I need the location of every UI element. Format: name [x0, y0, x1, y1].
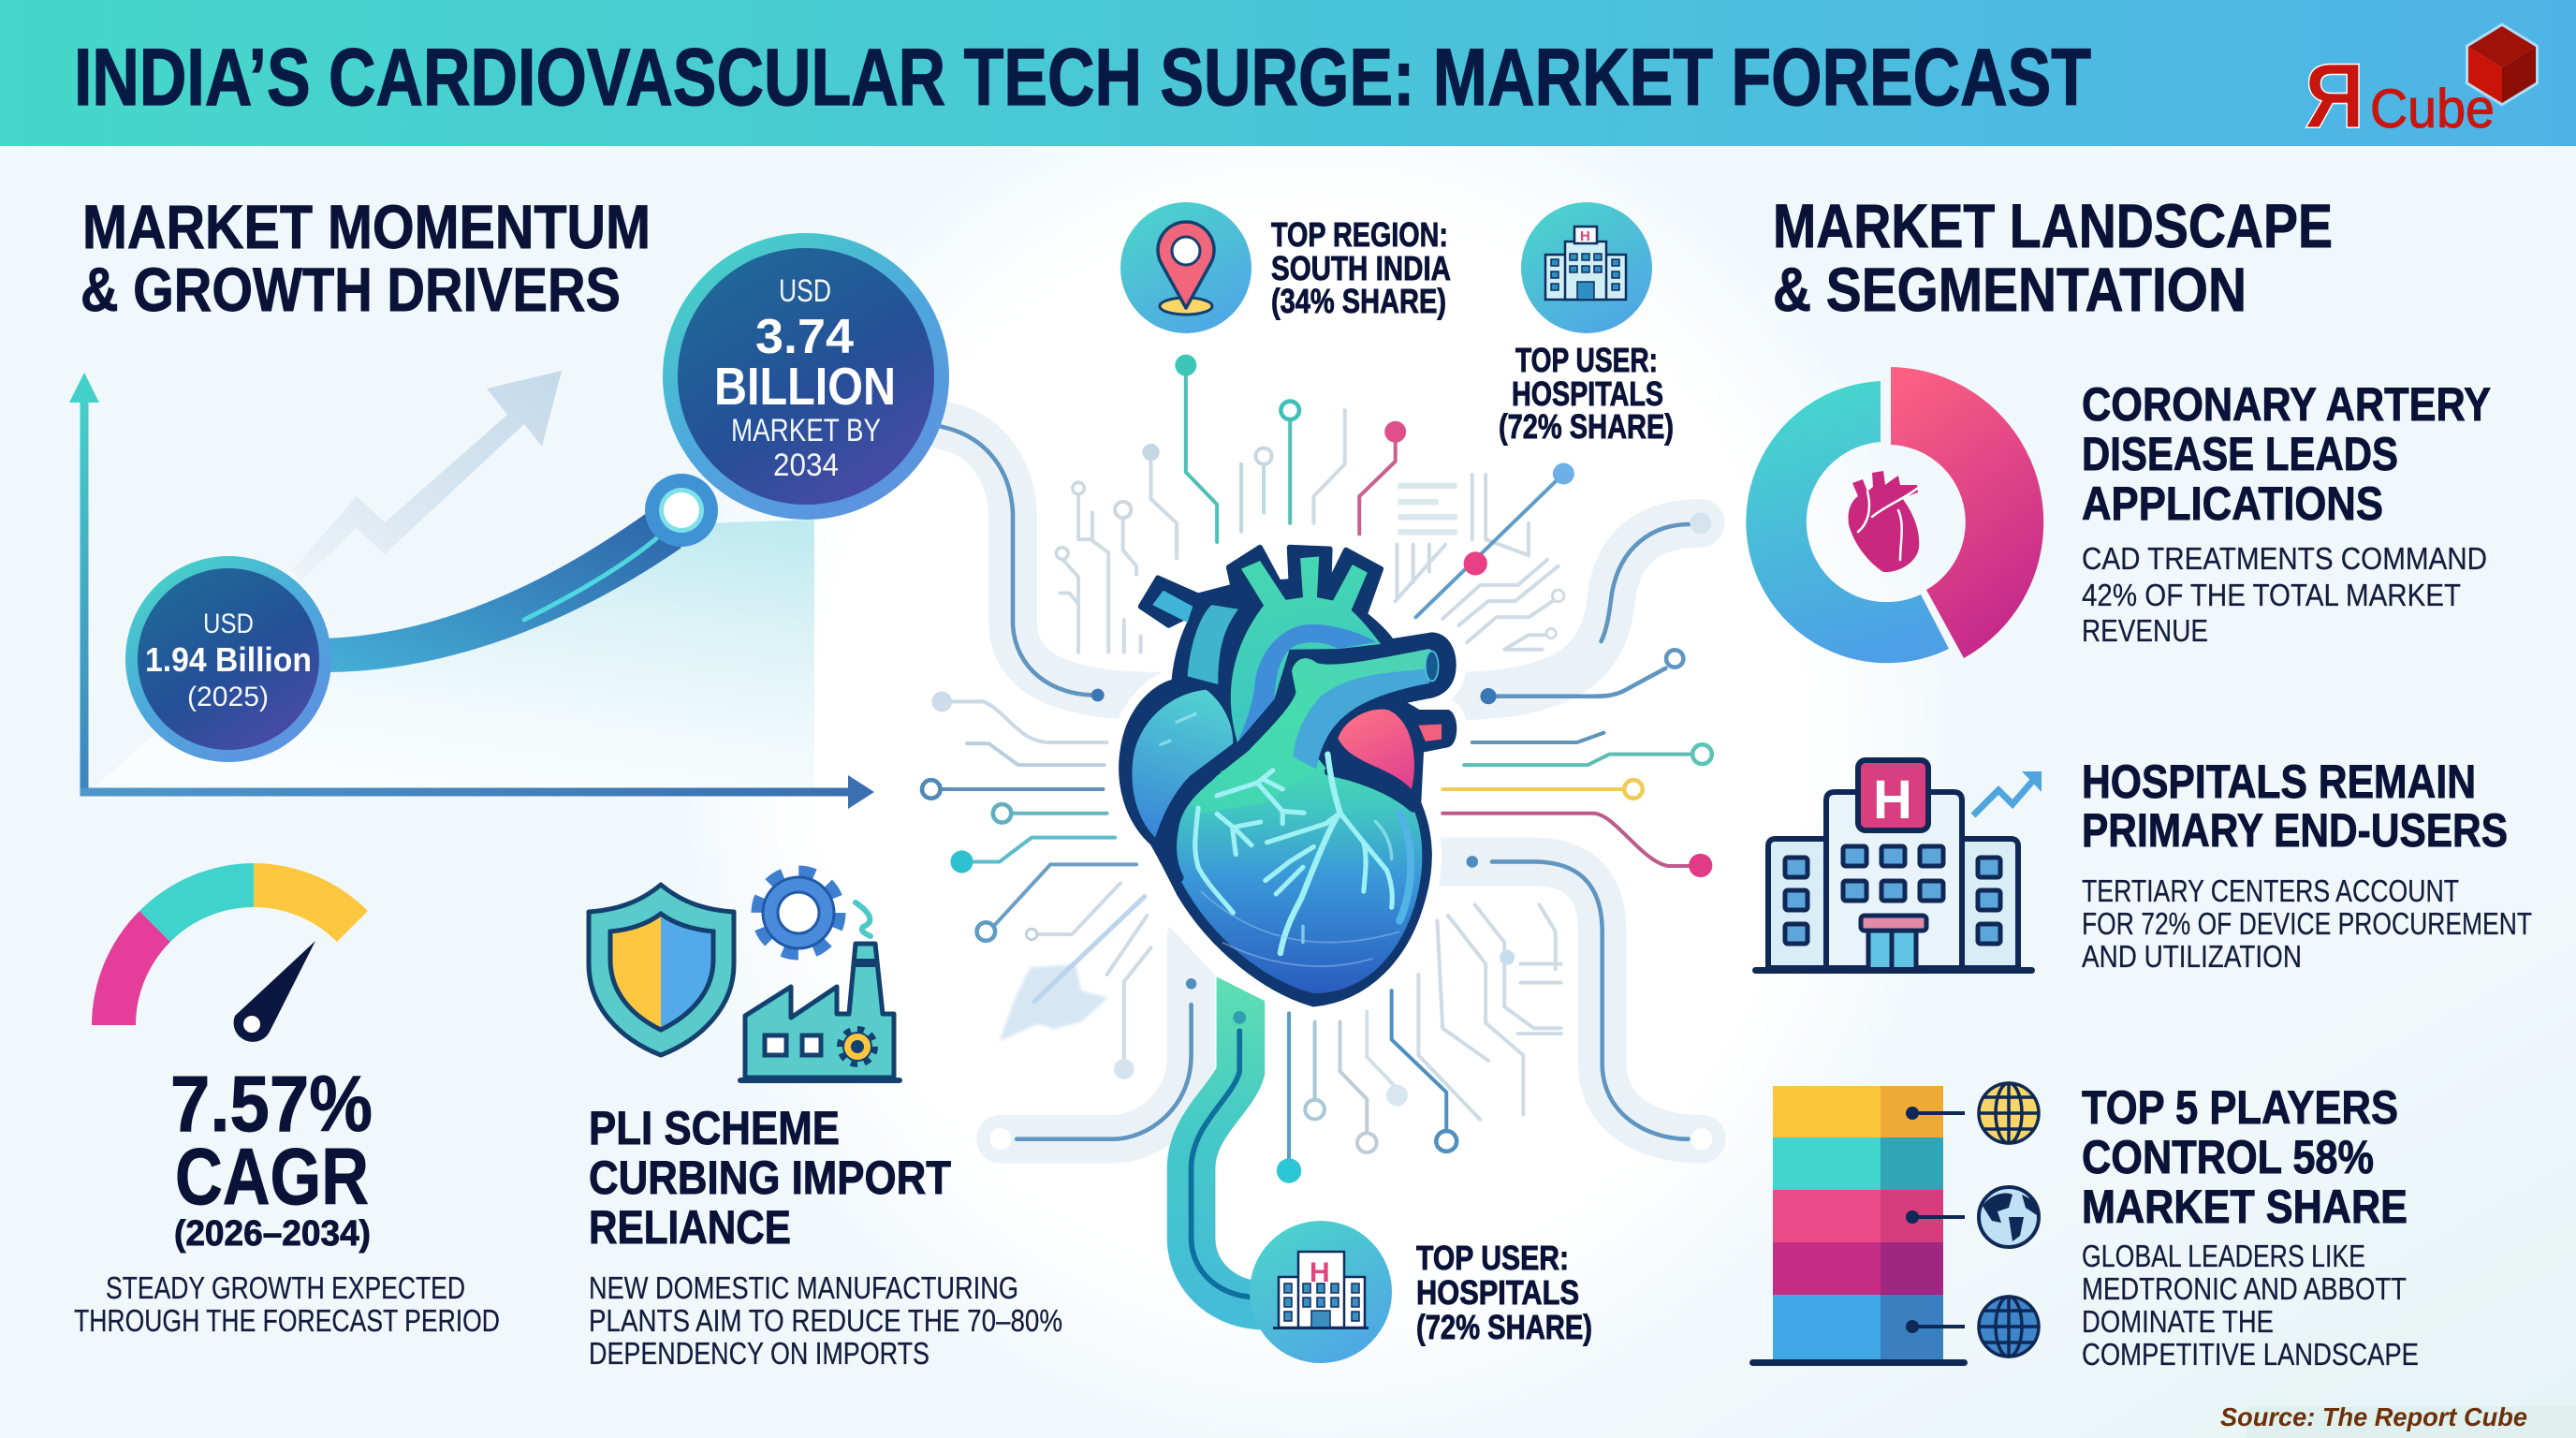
heart: green arch and vessels: [1231, 556, 1381, 742]
globe: yellow: [1979, 1083, 2039, 1143]
text: top user (lower): [1416, 1239, 1592, 1346]
wide pale circuit bands: [943, 425, 1702, 1139]
heart: ventricle right rim: [1399, 814, 1411, 921]
text: top user (lower): HOSPITALS: [1416, 1273, 1579, 1312]
text: hospitals remain: AND UTILIZATION: [2082, 939, 2302, 974]
text: top user (lower): (72% SHARE): [1416, 1308, 1592, 1346]
donut chart: [1746, 367, 2043, 663]
text: PLI scheme: NEW DOMESTIC MANUFACTURING: [589, 1270, 1018, 1305]
text: coronary artery: CAD TREATMENTS COMMAND: [2082, 541, 2487, 576]
bubble: 2034 value: MARKET BY: [731, 413, 881, 448]
gauge: [92, 863, 368, 1042]
top user: hospital icon badge: [1521, 202, 1652, 333]
text: top user (upper): HOSPITALS: [1512, 374, 1663, 413]
shaded area under curve: [94, 520, 814, 792]
top user: hospital badge lower: H: [1310, 1257, 1330, 1288]
growth curve: [318, 510, 681, 672]
text: PLI scheme: [589, 1102, 1062, 1371]
x axis: [80, 775, 874, 809]
circuit nodes: [922, 355, 1712, 1183]
bubble: 2034 value: BILLION: [714, 357, 896, 417]
bubble: 2034 value: USD: [779, 273, 831, 309]
light blue diagonal: [1034, 897, 1145, 1002]
text: hospitals remain: HOSPITALS REMAIN: [2082, 756, 2476, 808]
curve node: [645, 474, 718, 547]
donut: CAD share: [1891, 367, 2043, 658]
text: top region: SOUTH INDIA: [1271, 249, 1451, 287]
heart halo: [1121, 548, 1454, 1005]
heart: highlights: [1161, 714, 1392, 943]
teal band to hospital node: [1192, 969, 1266, 1306]
growth chart: [69, 233, 949, 809]
text: top user (upper): TOP USER:: [1515, 341, 1658, 379]
text: PLI scheme: RELIANCE: [589, 1201, 791, 1254]
stat: CAGR: THROUGH THE FORECAST PERIOD: [74, 1303, 500, 1338]
heart silhouette: [1121, 548, 1454, 1005]
text: top user (upper): [1499, 341, 1674, 446]
heading: market landscape: & SEGMENTATION: [1773, 255, 2247, 324]
text: PLI scheme: PLANTS AIM TO REDUCE THE 70–80%: [589, 1303, 1062, 1338]
gauge needle: [234, 941, 315, 1042]
icon: hospital building: [1752, 760, 2042, 974]
y axis: [69, 373, 99, 796]
gauge yellow segment: [254, 863, 368, 942]
centre glow: [655, 37, 1966, 1438]
heart: blue inner arch: [1237, 624, 1376, 742]
stat: CAGR: STEADY GROWTH EXPECTED: [106, 1270, 465, 1305]
icon: shield: [589, 885, 734, 1055]
bubble: 2034 value: 3.74: [755, 310, 854, 364]
heart: coronary veins: [1195, 755, 1392, 953]
heading: market momentum: & GROWTH DRIVERS: [80, 255, 621, 324]
stat: CAGR: (2026–2034): [174, 1214, 371, 1254]
text: top 5 players: MEDTRONIC AND ABBOTT: [2082, 1271, 2407, 1306]
pale circuit lines: [1034, 410, 1561, 1120]
bubble: 2034 value: 2034: [773, 448, 839, 483]
central circuit network and heart: [922, 355, 1712, 1306]
header band: [0, 0, 2576, 146]
heart: pink stub: [1418, 725, 1442, 741]
gauge teal segment: [139, 863, 254, 942]
text: coronary artery: CORONARY ARTERY: [2082, 378, 2491, 431]
heart: rear vessel: [1188, 605, 1238, 684]
text: top region: [1271, 215, 1451, 320]
text: top 5 players: COMPETITIVE LANDSCAPE: [2082, 1337, 2419, 1372]
heart: left atrium: [1132, 690, 1233, 838]
stat: CAGR: 7.57%: [170, 1060, 373, 1148]
icon: gear: [758, 873, 871, 953]
heart: pink atrium: [1338, 710, 1414, 789]
heading: market landscape: MARKET LANDSCAPE: [1773, 191, 2333, 260]
text: top 5 players: TOP 5 PLAYERS: [2082, 1081, 2398, 1134]
text: hospitals remain: [2082, 756, 2532, 974]
bubble: 2025 value: (2025): [187, 682, 269, 712]
text: PLI scheme: PLI SCHEME: [589, 1102, 840, 1154]
logo: RCube: [2305, 26, 2536, 147]
white cut-outs beneath heart: [1161, 910, 1268, 1003]
text: top user (lower): TOP USER:: [1416, 1239, 1569, 1277]
source strip tint: [2247, 1406, 2576, 1438]
heart: aorta blue underside: [1294, 668, 1429, 770]
coloured circuit lines: [938, 373, 1692, 1162]
pale text bars: [1398, 483, 1457, 535]
heart: navy outlines: [1173, 771, 1413, 878]
heart: aorta opening: [1426, 651, 1439, 682]
text: PLI scheme: DEPENDENCY ON IMPORTS: [589, 1336, 929, 1371]
bubble: 2025 value: [125, 556, 331, 762]
top user: hospital icon badge: H: [1580, 228, 1590, 244]
top user: hospital badge lower: [1250, 1221, 1392, 1363]
text: coronary artery: 42% OF THE TOTAL MARKET: [2082, 578, 2461, 612]
main blue traces: [941, 427, 1690, 1139]
icon: small heart: [1849, 471, 1919, 572]
heart: ventricle: [1173, 759, 1422, 993]
text: hospitals remain: PRIMARY END-USERS: [2082, 804, 2508, 857]
logo: RCube: Я: [2305, 44, 2364, 147]
text: PLI scheme: CURBING IMPORT: [589, 1152, 951, 1204]
text: hospitals remain: TERTIARY CENTERS ACCOUNT: [2082, 873, 2459, 908]
heading: market momentum: [80, 192, 651, 324]
text: coronary artery: DISEASE LEADS: [2082, 428, 2398, 480]
text: top 5 players: [2082, 1081, 2419, 1372]
text: top 5 players: MARKET SHARE: [2082, 1181, 2408, 1233]
heart: vessel stub: [1152, 591, 1193, 623]
icon: factory: [738, 944, 902, 1083]
title: INDIA’S CARDIOVASCULAR TECH SURGE: MARKET FORECAST: [74, 33, 2091, 123]
text: top region: (34% SHARE): [1271, 282, 1446, 320]
text: top 5 players: GLOBAL LEADERS LIKE: [2082, 1239, 2365, 1273]
bubble: 2025 value: USD: [203, 609, 254, 639]
stacked share column: [1749, 1086, 1968, 1366]
top region: pin icon badge: [1120, 202, 1251, 333]
donut: remaining share: [1746, 381, 1949, 663]
text: top region: TOP REGION:: [1271, 215, 1448, 254]
trace end dots: [989, 512, 1712, 1150]
heading: market landscape: [1773, 191, 2333, 324]
gauge pink segment: [92, 911, 170, 1025]
stat: CAGR: [74, 1060, 500, 1338]
text: coronary artery: [2082, 378, 2491, 648]
globe: continents: [1979, 1187, 2039, 1247]
heart: aorta: [1190, 649, 1439, 814]
stat: CAGR: CAGR: [175, 1133, 369, 1222]
connectors and globes: [1906, 1083, 2039, 1357]
bubble: 2025 value: 1.94 Billion: [145, 640, 312, 679]
text: coronary artery: APPLICATIONS: [2082, 477, 2383, 530]
text: top 5 players: CONTROL 58%: [2082, 1131, 2374, 1183]
text: top 5 players: DOMINATE THE: [2082, 1304, 2274, 1339]
ghost growth arrow: [292, 371, 562, 580]
source credit: Source: The Report Cube: [2220, 1402, 2527, 1431]
globe: blue: [1979, 1297, 2039, 1357]
text: coronary artery: REVENUE: [2082, 613, 2208, 648]
logo: RCube: Cube: [2370, 79, 2495, 139]
ghost map of India: [1000, 964, 1108, 1041]
icon: hospital building: H: [1873, 770, 1912, 830]
heading: market momentum: MARKET MOMENTUM: [82, 192, 651, 261]
bubble: 2034 value: [663, 233, 949, 520]
text: top user (upper): (72% SHARE): [1499, 407, 1674, 446]
